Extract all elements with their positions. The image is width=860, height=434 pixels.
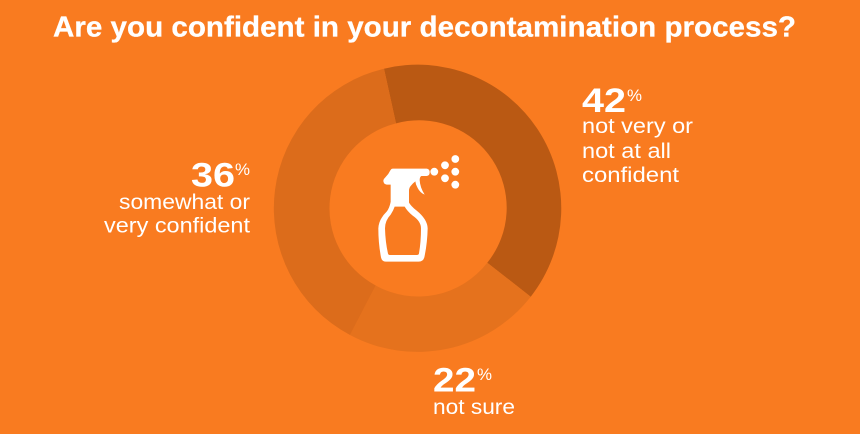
label: 42%: not at all [582,140,671,163]
spray droplets [430,155,459,189]
segment: 22% not sure [350,263,531,352]
segment: 36% somewhat or very confident [274,69,396,335]
label: 42%: not very or [582,115,693,138]
label: 22% [433,362,515,419]
label: 36% [104,156,250,238]
donut chart [274,65,561,352]
label: 36%: 36 [191,156,235,194]
label: 42%: 42 [582,82,626,120]
bottle trigger head and neck [383,169,430,204]
label: 22%: 22 [433,362,476,400]
label: 36%: very confident [104,214,250,238]
title: Are you confident in your decontamination process? [53,12,796,44]
segment: 42% not very or not at all confident [384,65,561,297]
icon: spray bottle [378,155,459,262]
label: 42%: % [627,87,642,105]
label: 36%: somewhat or [119,191,250,214]
label: 22%: not sure [433,396,515,419]
label: 22%: % [477,366,492,384]
label: 42% [582,82,693,187]
label: 42%: confident [582,164,679,187]
label: 36%: % [235,161,250,179]
bottle body [378,202,428,262]
